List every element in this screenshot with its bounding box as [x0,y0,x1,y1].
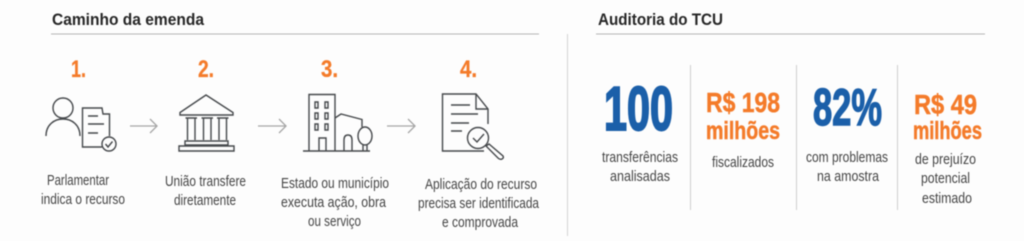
stat: R$ 49 milhões: R$ 49 [914,89,977,120]
stat: R$ 49 milhões [913,89,982,207]
heading: Caminho da emenda: Caminho da emenda [52,11,205,29]
arrow 1 to 2 [130,119,157,133]
step 4 text: precisa ser identificada [418,196,540,212]
step 2 text: União transfere [165,174,246,190]
stat: 82% [806,79,888,185]
stat: 100 transferências [602,75,678,185]
stat: 82%: na amostra [817,169,880,185]
icon: government building [179,95,234,151]
step 1 text [41,173,125,208]
arrow 3 to 4 [387,119,415,133]
step 3 text: executa ação, obra [281,195,387,211]
stat: 100 transferências: transferências [602,150,678,166]
stat: 82%: 82% [813,79,882,137]
step number 4: 4. [460,56,477,83]
step 2 [165,56,246,209]
step 4 [418,56,540,231]
step 1 text: indica o recurso [41,192,125,208]
stat: R$ 49 milhões: milhões [913,117,982,145]
step 3 text: ou serviço [308,214,361,230]
stat: 100 transferências: 100 [604,75,673,144]
step 3 [281,56,389,230]
stat: R$ 198 milhões [706,87,780,171]
stat: R$ 198 milhões: milhões [706,117,780,145]
step number 1: 1. [71,56,86,83]
step 3 text [281,176,389,230]
icon: city buildings and tree [303,94,372,151]
step number 3: 3. [321,56,338,83]
step 2 text [165,174,246,209]
step 4 text: e comprovada [442,215,519,231]
stat: R$ 49 milhões: potencial [921,171,970,187]
stat: R$ 49 milhões: de prejuízo [915,152,976,168]
heading: Auditoria do TCU: Auditoria do TCU [598,11,723,29]
icon: parliamentarian with document [46,98,116,151]
stat: R$ 198 milhões: R$ 198 [706,87,780,118]
arrow 2 to 3 [258,119,286,133]
step 1 [41,56,125,208]
step 4 text: Aplicação do recurso [425,177,537,193]
step 2 text: diretamente [174,193,236,209]
step 1 text: Parlamentar [47,173,109,189]
stat: 82%: com problemas [806,150,888,166]
step 4 text [418,177,540,231]
step 3 text: Estado ou município [281,176,389,192]
step number 2: 2. [198,56,214,83]
icon: document with magnifier [442,94,503,159]
stat: 100 transferências: analisadas [610,169,670,185]
stat: R$ 198 milhões: fiscalizados [712,155,774,171]
stat: R$ 49 milhões: estimado [922,191,972,207]
